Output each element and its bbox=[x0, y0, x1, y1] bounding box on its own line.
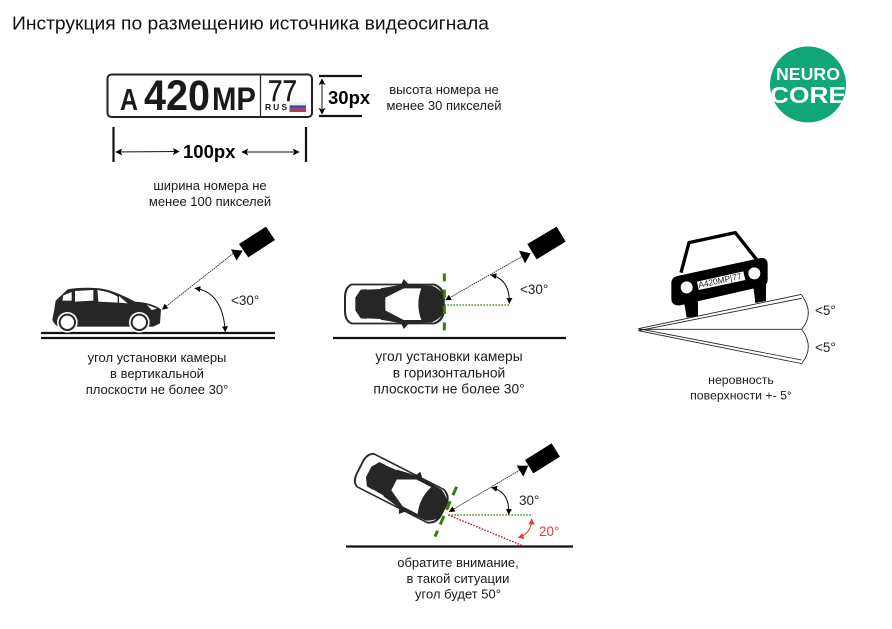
combined caption: в такой ситуации bbox=[407, 571, 509, 586]
width dimension: 100px bbox=[114, 127, 306, 162]
angle labels: <5° bbox=[815, 303, 836, 318]
angle label: 20: 20° bbox=[539, 524, 559, 539]
icon: rotated car bbox=[348, 446, 455, 532]
vertical caption: плоскости не более 30° bbox=[86, 382, 228, 397]
combined caption: угол будет 50° bbox=[415, 586, 501, 602]
logo: NeuroCore: NEURO bbox=[776, 64, 840, 84]
width caption: ширина номера не bbox=[153, 178, 267, 193]
angle label: <30° bbox=[231, 293, 259, 308]
width dimension: 100px: 100px bbox=[183, 141, 236, 162]
licence plate bbox=[108, 72, 312, 120]
icon: camera bbox=[449, 443, 560, 512]
combined caption: обратите внимание, bbox=[397, 555, 519, 570]
icon: camera bbox=[446, 227, 566, 300]
licence plate: RUS bbox=[265, 102, 287, 112]
angle label: 30: 30° bbox=[519, 493, 539, 508]
width caption: менее 100 пикселей bbox=[149, 194, 271, 209]
height caption: высота номера не bbox=[389, 82, 499, 97]
ground line bbox=[333, 337, 566, 339]
panel: vertical angle bbox=[41, 227, 275, 338]
licence plate: 420 bbox=[144, 72, 210, 120]
surface caption: поверхности +- 5° bbox=[690, 388, 792, 402]
horizontal caption: плоскости не более 30° bbox=[373, 382, 525, 396]
icon: car front view bbox=[671, 233, 768, 318]
horizontal caption: угол установки камеры bbox=[375, 349, 523, 364]
height dimension: 30px bbox=[319, 76, 371, 116]
icon: camera bbox=[162, 227, 275, 332]
vertical caption: угол установки камеры bbox=[88, 350, 226, 365]
panel: surface unevenness: <5° bbox=[815, 340, 836, 355]
ground lines bbox=[41, 333, 275, 338]
plate plane bbox=[435, 487, 457, 537]
icon: car front view: А420МР|77 bbox=[697, 271, 743, 290]
title: Инструкция по размещению источника видеосигнала bbox=[12, 14, 490, 34]
licence plate: А bbox=[120, 82, 138, 117]
logo: NeuroCore: CORE bbox=[770, 82, 846, 108]
angle label: <30° bbox=[520, 282, 548, 297]
horizontal caption: в горизонтальной bbox=[393, 366, 505, 380]
logo: NeuroCore bbox=[770, 46, 846, 122]
licence plate: МР bbox=[212, 81, 256, 117]
panel: horizontal angle bbox=[333, 227, 566, 338]
panel: surface unevenness bbox=[638, 233, 836, 364]
icon: top view car bbox=[344, 279, 445, 329]
height caption: менее 30 пикселей bbox=[386, 98, 502, 113]
surface caption: неровность bbox=[708, 373, 774, 387]
wedges bbox=[638, 294, 808, 364]
ground line bbox=[346, 545, 573, 548]
licence plate: 77 bbox=[268, 75, 297, 108]
icon: side view car bbox=[52, 288, 161, 333]
height dimension: 30px: 30px bbox=[328, 87, 371, 108]
plate plane bbox=[440, 273, 449, 333]
vertical caption: в вертикальной bbox=[110, 366, 204, 381]
panel: combined angle bbox=[346, 443, 573, 546]
